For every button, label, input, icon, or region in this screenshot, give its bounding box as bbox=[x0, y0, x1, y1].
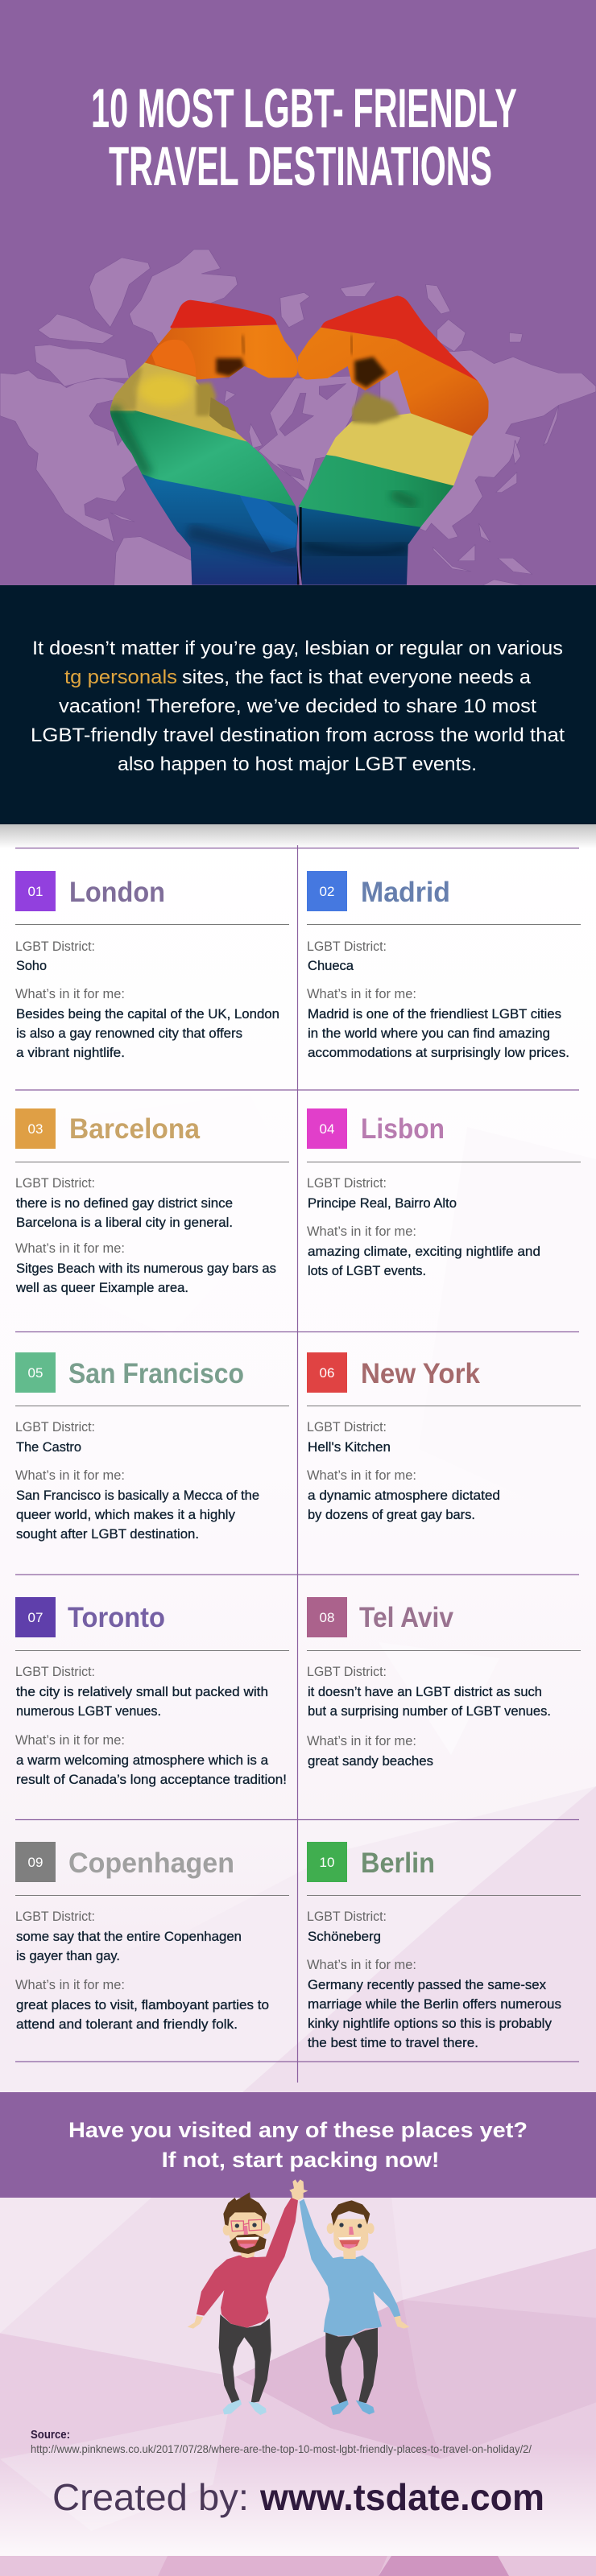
card: Madrid: LGBT District: bbox=[307, 939, 387, 954]
card: London: London bbox=[69, 877, 165, 908]
card: Lisbon: What’s in it for me: bbox=[307, 1224, 416, 1239]
card: Copenhagen: 09 bbox=[28, 1855, 43, 1870]
man in blue bbox=[300, 2199, 409, 2415]
card: London: is also a gay renowned city that offers bbox=[16, 1026, 242, 1041]
card: New York: Hell's Kitchen bbox=[308, 1440, 391, 1455]
intro text: LGBT-friendly travel destination from across the world that bbox=[31, 724, 565, 746]
card: Madrid: in the world where you can find amazing bbox=[308, 1026, 550, 1041]
card: Madrid: What’s in it for me: bbox=[307, 986, 416, 1001]
card: Toronto: a warm welcoming atmosphere which is a bbox=[16, 1753, 269, 1768]
card: Tel Aviv: great sandy beaches bbox=[308, 1754, 433, 1769]
card: Toronto: result of Canada’s long acceptance tradition! bbox=[16, 1773, 287, 1787]
card: Barcelona: Barcelona bbox=[69, 1113, 201, 1145]
card: Toronto: What’s in it for me: bbox=[15, 1732, 125, 1748]
credit line bbox=[52, 2476, 544, 2518]
card: London: 01 bbox=[28, 884, 43, 899]
card: San Francisco: The Castro bbox=[16, 1440, 81, 1455]
card: Lisbon: lots of LGBT events. bbox=[308, 1264, 426, 1278]
card: Berlin: Germany recently passed the same-sex bbox=[308, 1978, 547, 1992]
intro text bbox=[31, 638, 565, 775]
panel: header bbox=[0, 0, 596, 588]
card: Copenhagen: LGBT District: bbox=[15, 1909, 95, 1924]
card: San Francisco: LGBT District: bbox=[15, 1419, 95, 1435]
card: San Francisco: sought after LGBT destination. bbox=[16, 1527, 199, 1542]
panel: call to action: If not, start packing now! bbox=[162, 2148, 440, 2172]
card: Berlin: marriage while the Berlin offers numerous bbox=[308, 1997, 561, 2012]
card: San Francisco: San Francisco is basically a Mecca of the bbox=[16, 1488, 259, 1503]
card: Lisbon: amazing climate, exciting nightlife and bbox=[308, 1245, 540, 1259]
card: Copenhagen bbox=[15, 1842, 289, 2032]
card: London: a vibrant nightlife. bbox=[16, 1046, 125, 1060]
panel: footer background bbox=[0, 2092, 596, 2576]
title bbox=[91, 77, 517, 197]
source note bbox=[31, 2428, 532, 2455]
card: Madrid: accommodations at surprisingly low prices. bbox=[308, 1046, 569, 1060]
card: Tel Aviv bbox=[307, 1597, 581, 1769]
card: Barcelona: What’s in it for me: bbox=[15, 1241, 125, 1256]
card: Copenhagen: What’s in it for me: bbox=[15, 1977, 125, 1992]
card: Copenhagen: Copenhagen bbox=[68, 1847, 234, 1879]
card: New York: by dozens of great gay bars. bbox=[308, 1508, 475, 1522]
card: London: What’s in it for me: bbox=[15, 986, 125, 1001]
card: Berlin: LGBT District: bbox=[307, 1909, 387, 1924]
card: San Francisco: queer world, which makes it a highly bbox=[16, 1508, 236, 1522]
source note: Source: bbox=[31, 2428, 70, 2442]
card: Copenhagen: attend and tolerant and friendly folk. bbox=[16, 2017, 238, 2032]
panel: destinations grid bbox=[15, 845, 581, 2083]
card: Copenhagen: is gayer than gay. bbox=[16, 1949, 120, 1963]
credit line: www.tsdate.com bbox=[259, 2476, 544, 2518]
card: Madrid: Madrid is one of the friendliest LGBT cities bbox=[308, 1007, 561, 1022]
card: Barcelona: Barcelona is a liberal city in general. bbox=[16, 1216, 233, 1230]
card: Lisbon: LGBT District: bbox=[307, 1175, 387, 1191]
card: London bbox=[15, 871, 289, 1060]
card: London: Soho bbox=[16, 959, 47, 973]
card: Madrid: Chueca bbox=[308, 959, 354, 973]
card: Copenhagen: some say that the entire Copenhagen bbox=[16, 1930, 242, 1944]
card: Toronto: the city is relatively small but packed with bbox=[16, 1685, 268, 1699]
panel: intro bbox=[0, 585, 596, 824]
card: Berlin: 10 bbox=[320, 1855, 334, 1870]
page background bbox=[0, 824, 596, 2093]
man with beard bbox=[188, 2179, 308, 2415]
world map bbox=[0, 250, 596, 585]
illustration: two men high-fiving bbox=[188, 2179, 409, 2415]
card: Barcelona: well as queer Eixample area. bbox=[15, 1281, 188, 1295]
card: Toronto bbox=[15, 1597, 289, 1787]
card: New York: New York bbox=[361, 1358, 480, 1389]
card: Toronto: LGBT District: bbox=[15, 1664, 95, 1679]
intro text: vacation! Therefore, we’ve decided to share 10 most bbox=[59, 696, 536, 717]
bottom strip bbox=[0, 2556, 596, 2576]
card: New York: a dynamic atmosphere dictated bbox=[308, 1488, 500, 1503]
card: Berlin: Schöneberg bbox=[308, 1930, 381, 1944]
card: San Francisco: 05 bbox=[28, 1365, 43, 1381]
card: Berlin bbox=[307, 1842, 581, 2050]
card: Madrid: 02 bbox=[320, 884, 334, 899]
card: Barcelona: LGBT District: bbox=[15, 1175, 95, 1191]
card: Berlin: What’s in it for me: bbox=[307, 1957, 416, 1972]
intro text: sites, the fact is that everyone needs a bbox=[182, 667, 532, 688]
intro text: It doesn’t matter if you’re gay, lesbian or regular on various bbox=[32, 638, 563, 659]
panel: call to action: Have you visited any of these places yet? bbox=[68, 2118, 528, 2142]
card: Tel Aviv: LGBT District: bbox=[307, 1664, 387, 1679]
icon: rainbow heart hands bbox=[107, 290, 491, 588]
card: San Francisco: What’s in it for me: bbox=[15, 1468, 125, 1483]
credit line: Created by: bbox=[52, 2476, 249, 2518]
card: Barcelona: there is no defined gay district since bbox=[16, 1196, 233, 1211]
card: Copenhagen: great places to visit, flamboyant parties to bbox=[16, 1998, 269, 2013]
card: Toronto: 07 bbox=[28, 1610, 43, 1625]
card: Lisbon bbox=[307, 1108, 581, 1278]
panel: call to action bbox=[0, 2092, 596, 2198]
card: San Francisco bbox=[15, 1352, 289, 1542]
card: Madrid bbox=[307, 871, 581, 1060]
source note: http://www.pinknews.co.uk/2017/07/28/where-are-the-top-10-most-lgbt-friendly-places-to-travel-on-holiday/2/ bbox=[31, 2442, 532, 2455]
card: Toronto: numerous LGBT venues. bbox=[16, 1704, 161, 1719]
card: Barcelona: Sitges Beach with its numerous gay bars as bbox=[16, 1261, 276, 1276]
card: Toronto: Toronto bbox=[68, 1602, 165, 1633]
card: London: LGBT District: bbox=[15, 939, 95, 954]
card: Berlin: kinky nightlife options so this is probably bbox=[308, 2017, 553, 2031]
card: Berlin: the best time to travel there. bbox=[308, 2036, 478, 2050]
card: Tel Aviv: What’s in it for me: bbox=[307, 1733, 416, 1748]
card: San Francisco: San Francisco bbox=[68, 1358, 244, 1389]
card: New York: 06 bbox=[320, 1365, 334, 1381]
card: New York: What’s in it for me: bbox=[307, 1468, 416, 1483]
card: Tel Aviv: it doesn’t have an LGBT district as such bbox=[308, 1685, 542, 1699]
background polygons: grid area bbox=[0, 1095, 596, 2093]
card: London: Besides being the capital of the UK, London bbox=[16, 1007, 279, 1022]
card: Tel Aviv: Tel Aviv bbox=[359, 1602, 453, 1633]
card: Tel Aviv: 08 bbox=[320, 1610, 334, 1625]
intro text: also happen to host major LGBT events. bbox=[118, 753, 477, 775]
card: Barcelona: 03 bbox=[28, 1121, 43, 1137]
card: Barcelona bbox=[15, 1108, 289, 1295]
card: New York: LGBT District: bbox=[307, 1419, 387, 1435]
card: New York bbox=[307, 1352, 581, 1522]
intro text: tg personals bbox=[64, 667, 177, 688]
card: Madrid: Madrid bbox=[361, 877, 450, 908]
card: Lisbon: 04 bbox=[320, 1121, 334, 1137]
card: Berlin: Berlin bbox=[361, 1847, 435, 1879]
card: Lisbon: Lisbon bbox=[361, 1113, 445, 1145]
card: Tel Aviv: but a surprising number of LGBT venues. bbox=[308, 1704, 551, 1719]
card: Lisbon: Principe Real, Bairro Alto bbox=[308, 1196, 457, 1211]
